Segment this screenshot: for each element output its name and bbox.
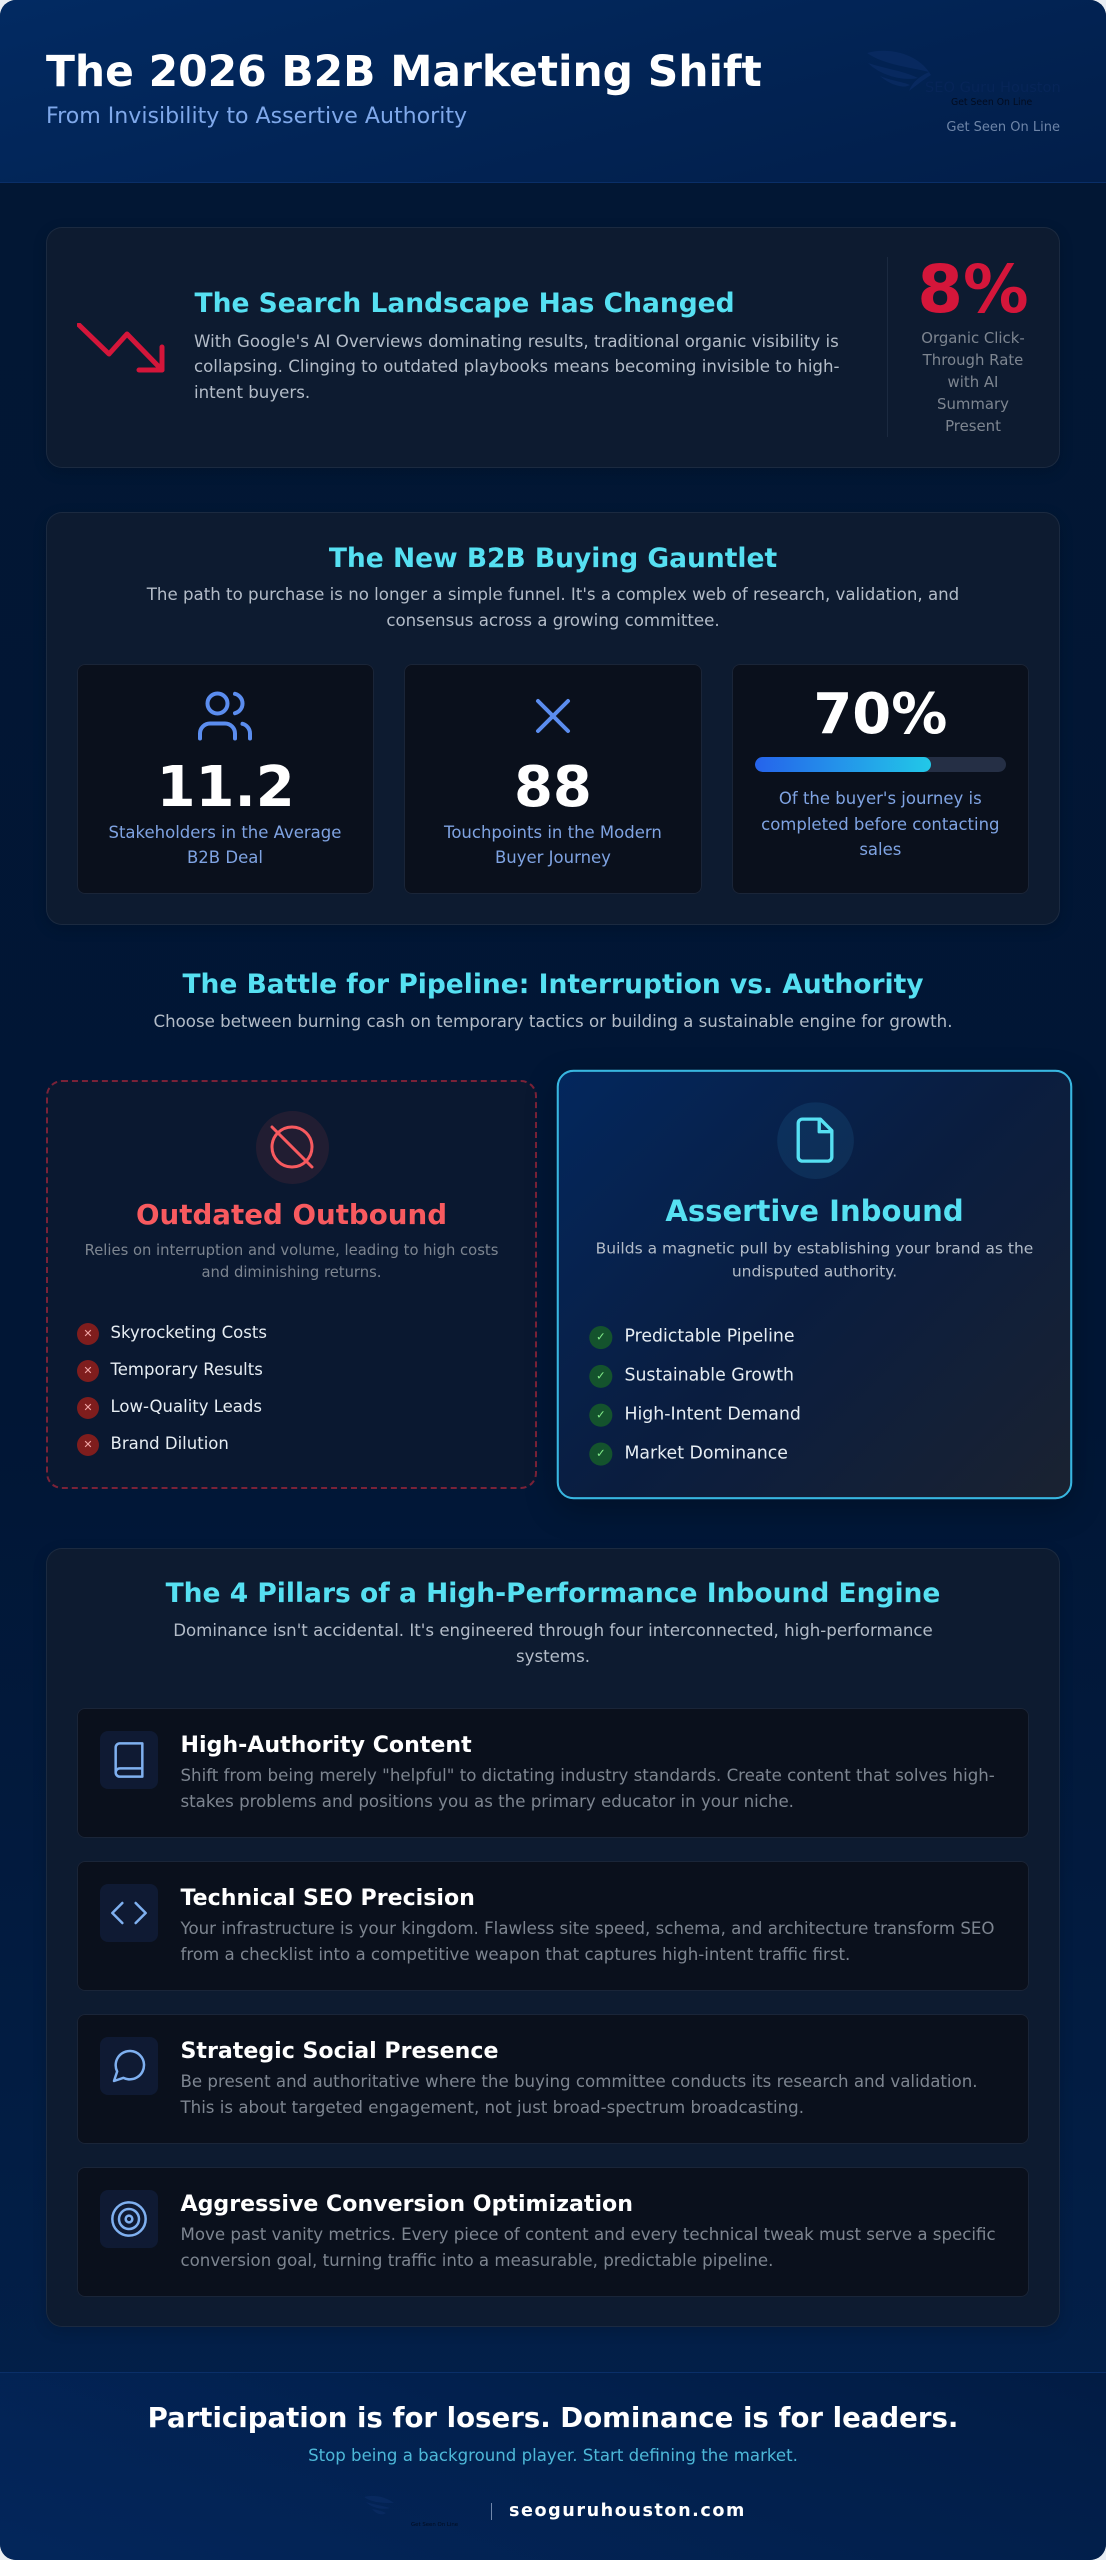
progress bar [755,757,1006,772]
intro text: systems. [516,1647,590,1666]
pillar title: Aggressive Conversion Optimization [180,2191,633,2217]
intro text [146,585,959,630]
heading: The Search Landscape Has Changed [194,288,735,319]
pillar description [180,2072,978,2117]
item: Market Dominance [624,1442,787,1462]
pillar description: from a checklist into a competitive weapon that captures high-intent traffic first. [180,1945,850,1964]
stat label: Organic Click- [921,329,1025,347]
description: Builds a magnetic pull by establishing your brand as the [595,1240,1033,1258]
stat card: stakeholders [77,664,374,894]
logo wordmark: SEO Guru Houston [925,79,1061,96]
divider [887,257,888,437]
stat card: 70 percent [732,664,1029,894]
item: Brand Dilution [110,1434,229,1453]
icon: trending down arrow [77,323,164,372]
panel: buying gauntlet [46,512,1060,925]
logo: SEO Guru Houston [868,51,1061,135]
pillar description [180,2225,996,2270]
icon: footer swoosh [364,2496,394,2514]
pillar description: Shift from being merely "helpful" to dictating industry standards. Create content that solves high- [180,1766,995,1785]
pillar: social [77,2014,1029,2144]
description: Relies on interruption and volume, leading to high costs [85,1242,498,1259]
body text: With Google's AI Overviews dominating results, traditional organic visibility is [194,332,839,351]
panel: outdated outbound [46,1080,537,1489]
stat label: with AI [948,373,998,391]
item [589,1325,794,1350]
label: B2B Deal [187,848,263,867]
item: ✓ [595,1446,605,1460]
panel: search landscape [46,227,1060,468]
tagline: Get Seen On Line [946,120,1060,135]
stat: 8%: 8% [917,252,1029,328]
item [589,1364,793,1388]
pillar description: Your infrastructure is your kingdom. Flawless site speed, schema, and architecture transform SEO [180,1919,995,1938]
logo small tagline: Get Seen On Line [951,97,1032,108]
closing subline: Stop being a background player. Start defining the market. [308,2446,798,2465]
stat label: Summary [937,395,1009,413]
pillar: content [77,1708,1029,1838]
pillar description: stakes problems and positions you as the primary educator in your niche. [180,1792,794,1811]
label: sales [859,840,901,859]
item: Skyrocketing Costs [110,1323,267,1342]
panel: assertive inbound [556,1070,1072,1499]
pillar title: Strategic Social Presence [180,2038,498,2064]
item [589,1442,787,1466]
pillar title: High-Authority Content [180,1732,472,1758]
item: ✓ [595,1368,605,1382]
label: completed before contacting [761,815,1000,834]
item [77,1434,229,1456]
intro text: The path to purchase is no longer a simple funnel. It's a complex web of research, validation, and [147,585,959,604]
heading: Assertive Inbound [665,1193,963,1228]
label: Of the buyer's journey is [779,789,982,808]
stat label [921,329,1025,435]
list: positives [589,1325,800,1466]
footer logo tagline: Get Seen On Line [411,2522,458,2528]
pillar description: Move past vanity metrics. Every piece of content and every technical tweak must serve a specific [180,2225,996,2244]
pillar description [180,1919,995,1964]
heading: The 4 Pillars of a High-Performance Inbound Engine [166,1578,940,1609]
pillar description: conversion goal, turning traffic into a measurable, predictable pipeline. [180,2251,773,2270]
description [595,1240,1033,1281]
header [0,0,1106,183]
heading: Outdated Outbound [136,1198,447,1231]
number: 70% [813,682,947,747]
item: Predictable Pipeline [624,1325,794,1345]
icon: book [100,1731,158,1789]
icon: logo swoosh [868,51,931,90]
item: ✕ [83,1327,93,1340]
intro text: Dominance isn't accidental. It's engineered through four interconnected, high-performance [173,1621,933,1640]
pillar title: Technical SEO Precision [180,1885,475,1911]
item: ✓ [595,1330,605,1343]
stat card: touchpoints [404,664,702,894]
progress fill [755,757,931,772]
icon: target [100,2190,158,2248]
pillar: technical [77,1861,1029,1991]
icon: users [198,692,252,740]
item: Low-Quality Leads [110,1397,262,1416]
pillar description [180,1766,995,1811]
item: ✓ [595,1407,605,1421]
subtitle: From Invisibility to Assertive Authority [46,103,467,129]
pillar description: This is about targeted engagement, not just broad-spectrum broadcasting. [180,2098,804,2117]
item: Sustainable Growth [624,1364,793,1384]
heading: The New B2B Buying Gauntlet [329,543,777,574]
pillar: conversion [77,2167,1029,2297]
body text: intent buyers. [194,383,310,402]
panel: four pillars [46,1548,1060,2327]
icon: prohibited [256,1110,328,1184]
icon: chat bubble [100,2037,158,2095]
website url: seoguruhouston.com [509,2501,746,2521]
item: ✕ [83,1438,93,1451]
intro text: consensus across a growing committee. [386,611,720,630]
description: undisputed authority. [731,1263,897,1281]
label: Touchpoints in the Modern [444,822,662,842]
description: and diminishing returns. [201,1264,382,1281]
label [108,822,341,867]
heading: battle for pipeline: The Battle for Pipeline: Interruption vs. Authority [182,969,924,1000]
list: negatives [77,1323,267,1456]
label: Stakeholders in the Average [108,822,341,842]
icon: code [100,1884,158,1942]
item: Temporary Results [110,1360,263,1379]
divider [490,2503,492,2520]
label [761,789,1000,859]
title: The 2026 B2B Marketing Shift [46,47,762,96]
label: Buyer Journey [495,848,611,867]
item [589,1403,800,1427]
item: ✕ [83,1364,93,1377]
icon: file [776,1102,853,1178]
number: 11.2 [157,755,295,820]
item: ✕ [83,1401,93,1414]
intro text [173,1621,933,1666]
body text: collapsing. Clinging to outdated playbooks means becoming invisible to high- [194,357,840,376]
label [444,822,662,867]
number: 88 [514,755,592,820]
item: High-Intent Demand [624,1403,800,1423]
icon: x [536,698,570,734]
closing headline: Participation is for losers. Dominance is for leaders. [148,2401,958,2434]
logo: footer small [364,2496,458,2528]
stat label: Present [945,417,1001,435]
stat label: Through Rate [923,351,1023,369]
body text [194,332,840,402]
subheading: Choose between burning cash on temporary tactics or building a sustainable engine for growth. [153,1012,952,1031]
footer [0,2372,1106,2560]
description [85,1242,498,1281]
pillar description: Be present and authoritative where the buying committee conducts its research and validation. [180,2072,978,2091]
